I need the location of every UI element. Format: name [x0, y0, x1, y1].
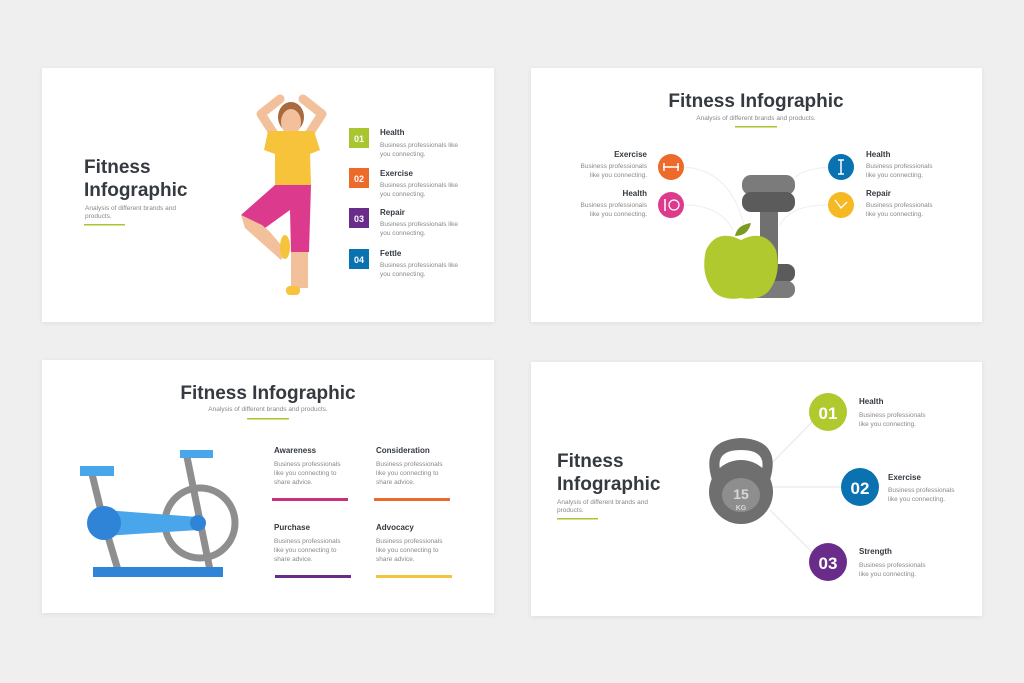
- item: Health right: Health: [866, 150, 891, 159]
- list item 02: Exercise: [380, 169, 413, 178]
- list item 02: 02: [354, 174, 364, 184]
- item 02 Exercise: Business professionals: [888, 487, 955, 494]
- item 01 Health: Health: [859, 397, 884, 406]
- subtitle: Analysis of different brands and products.: [696, 115, 816, 122]
- title: Fitness Infographic: [668, 91, 844, 112]
- item: Purchase: Business professionals: [274, 538, 341, 545]
- item: Health right: [828, 150, 933, 180]
- list item 03: Business professionals like: [380, 221, 458, 228]
- dumbbell and apple: [704, 175, 795, 299]
- list item 03: 03: [354, 214, 364, 224]
- item: Health left: [581, 189, 684, 218]
- item: Exercise: [581, 150, 684, 180]
- item: Health right: like you connecting.: [866, 172, 923, 179]
- subtitle: [557, 499, 648, 514]
- item: Repair: [828, 189, 933, 218]
- panel: bottom-left bike: [42, 360, 494, 613]
- item: Awareness: share advice.: [274, 479, 313, 486]
- item 03 Strength: 03: [819, 554, 837, 573]
- subtitle: Analysis of different brands and products.: [208, 406, 328, 413]
- item: Health left: like you connecting.: [590, 211, 647, 218]
- list item 03: Repair: [380, 208, 405, 217]
- list item 02: you connecting.: [380, 191, 426, 198]
- subtitle: products.: [557, 507, 584, 514]
- title: Fitness: [84, 157, 151, 178]
- title: Infographic: [84, 180, 188, 201]
- list item 01: Health: [380, 128, 405, 137]
- item 02 Exercise: like you connecting.: [888, 496, 945, 503]
- subtitle: Analysis of different brands and: [557, 499, 648, 506]
- figure: yoga woman: [241, 99, 322, 295]
- item: Repair: Business professionals: [866, 202, 933, 209]
- item: Health right: Business professionals: [866, 163, 933, 170]
- item: Consideration: Consideration: [376, 446, 430, 455]
- item: Advocacy: Advocacy: [376, 523, 414, 532]
- item: Awareness: Awareness: [274, 446, 317, 455]
- item 01 Health: 01: [819, 404, 837, 423]
- list item 04: [349, 249, 458, 278]
- title: [84, 157, 188, 201]
- item 03 Strength: Strength: [859, 547, 892, 556]
- item: Purchase: [274, 523, 351, 578]
- list item 01: [349, 128, 458, 158]
- list item 04: you connecting.: [380, 271, 426, 278]
- item: Exercise: like you connecting.: [590, 172, 647, 179]
- item: Repair: Repair: [866, 189, 891, 198]
- kettlebell: 15: [733, 486, 749, 502]
- subtitle: [85, 205, 176, 220]
- item: Consideration: Business professionals: [376, 461, 443, 468]
- list item 01: you connecting.: [380, 151, 426, 158]
- panel: top-left yoga: [42, 68, 494, 322]
- item: Advocacy: Business professionals: [376, 538, 443, 545]
- item: Awareness: [272, 446, 348, 501]
- item: Purchase: share advice.: [274, 556, 313, 563]
- list item 04: Fettle: [380, 249, 402, 258]
- panel: top-right dumbbell: [531, 68, 982, 322]
- subtitle: products.: [85, 213, 112, 220]
- title: [557, 451, 661, 495]
- kettlebell: [709, 438, 773, 524]
- panel: bottom-right kettlebell: [531, 362, 982, 616]
- item 03 Strength: like you connecting.: [859, 571, 916, 578]
- list item 01: Business professionals like: [380, 142, 458, 149]
- item: Consideration: like you connecting to: [376, 470, 439, 477]
- item: Advocacy: share advice.: [376, 556, 415, 563]
- list item 04: Business professionals like: [380, 262, 458, 269]
- item: Health left: Business professionals: [581, 202, 648, 209]
- item 02 Exercise: Exercise: [888, 473, 921, 482]
- list item 02: [349, 168, 458, 198]
- item 02 Exercise: 02: [851, 479, 869, 498]
- item: Exercise: Exercise: [614, 150, 648, 159]
- list item 04: 04: [354, 255, 364, 265]
- item 01 Health: [809, 393, 926, 431]
- item: Purchase: like you connecting to: [274, 547, 337, 554]
- item 01 Health: Business professionals: [859, 412, 926, 419]
- item 01 Health: like you connecting.: [859, 421, 916, 428]
- item: Health left: Health: [623, 189, 647, 198]
- item: Repair: like you connecting.: [866, 211, 923, 218]
- item 03 Strength: [809, 543, 926, 581]
- list item 01: 01: [354, 134, 364, 144]
- list item 03: you connecting.: [380, 230, 426, 237]
- item: Exercise: Business professionals: [581, 163, 648, 170]
- item: Advocacy: [376, 523, 452, 578]
- item: Awareness: Business professionals: [274, 461, 341, 468]
- title: Infographic: [557, 474, 661, 495]
- list item 02: Business professionals like: [380, 182, 458, 189]
- item: Advocacy: like you connecting to: [376, 547, 439, 554]
- item 03 Strength: Business professionals: [859, 562, 926, 569]
- bike: [80, 450, 235, 577]
- item 02 Exercise: [841, 468, 955, 506]
- title: Fitness Infographic: [180, 383, 356, 404]
- list item 03: [349, 208, 458, 237]
- item: Purchase: Purchase: [274, 523, 311, 532]
- kettlebell: KG: [736, 505, 747, 512]
- item: Awareness: like you connecting to: [274, 470, 337, 477]
- item: Consideration: [374, 446, 450, 501]
- subtitle: Analysis of different brands and: [85, 205, 176, 212]
- item: Consideration: share advice.: [376, 479, 415, 486]
- title: Fitness: [557, 451, 624, 472]
